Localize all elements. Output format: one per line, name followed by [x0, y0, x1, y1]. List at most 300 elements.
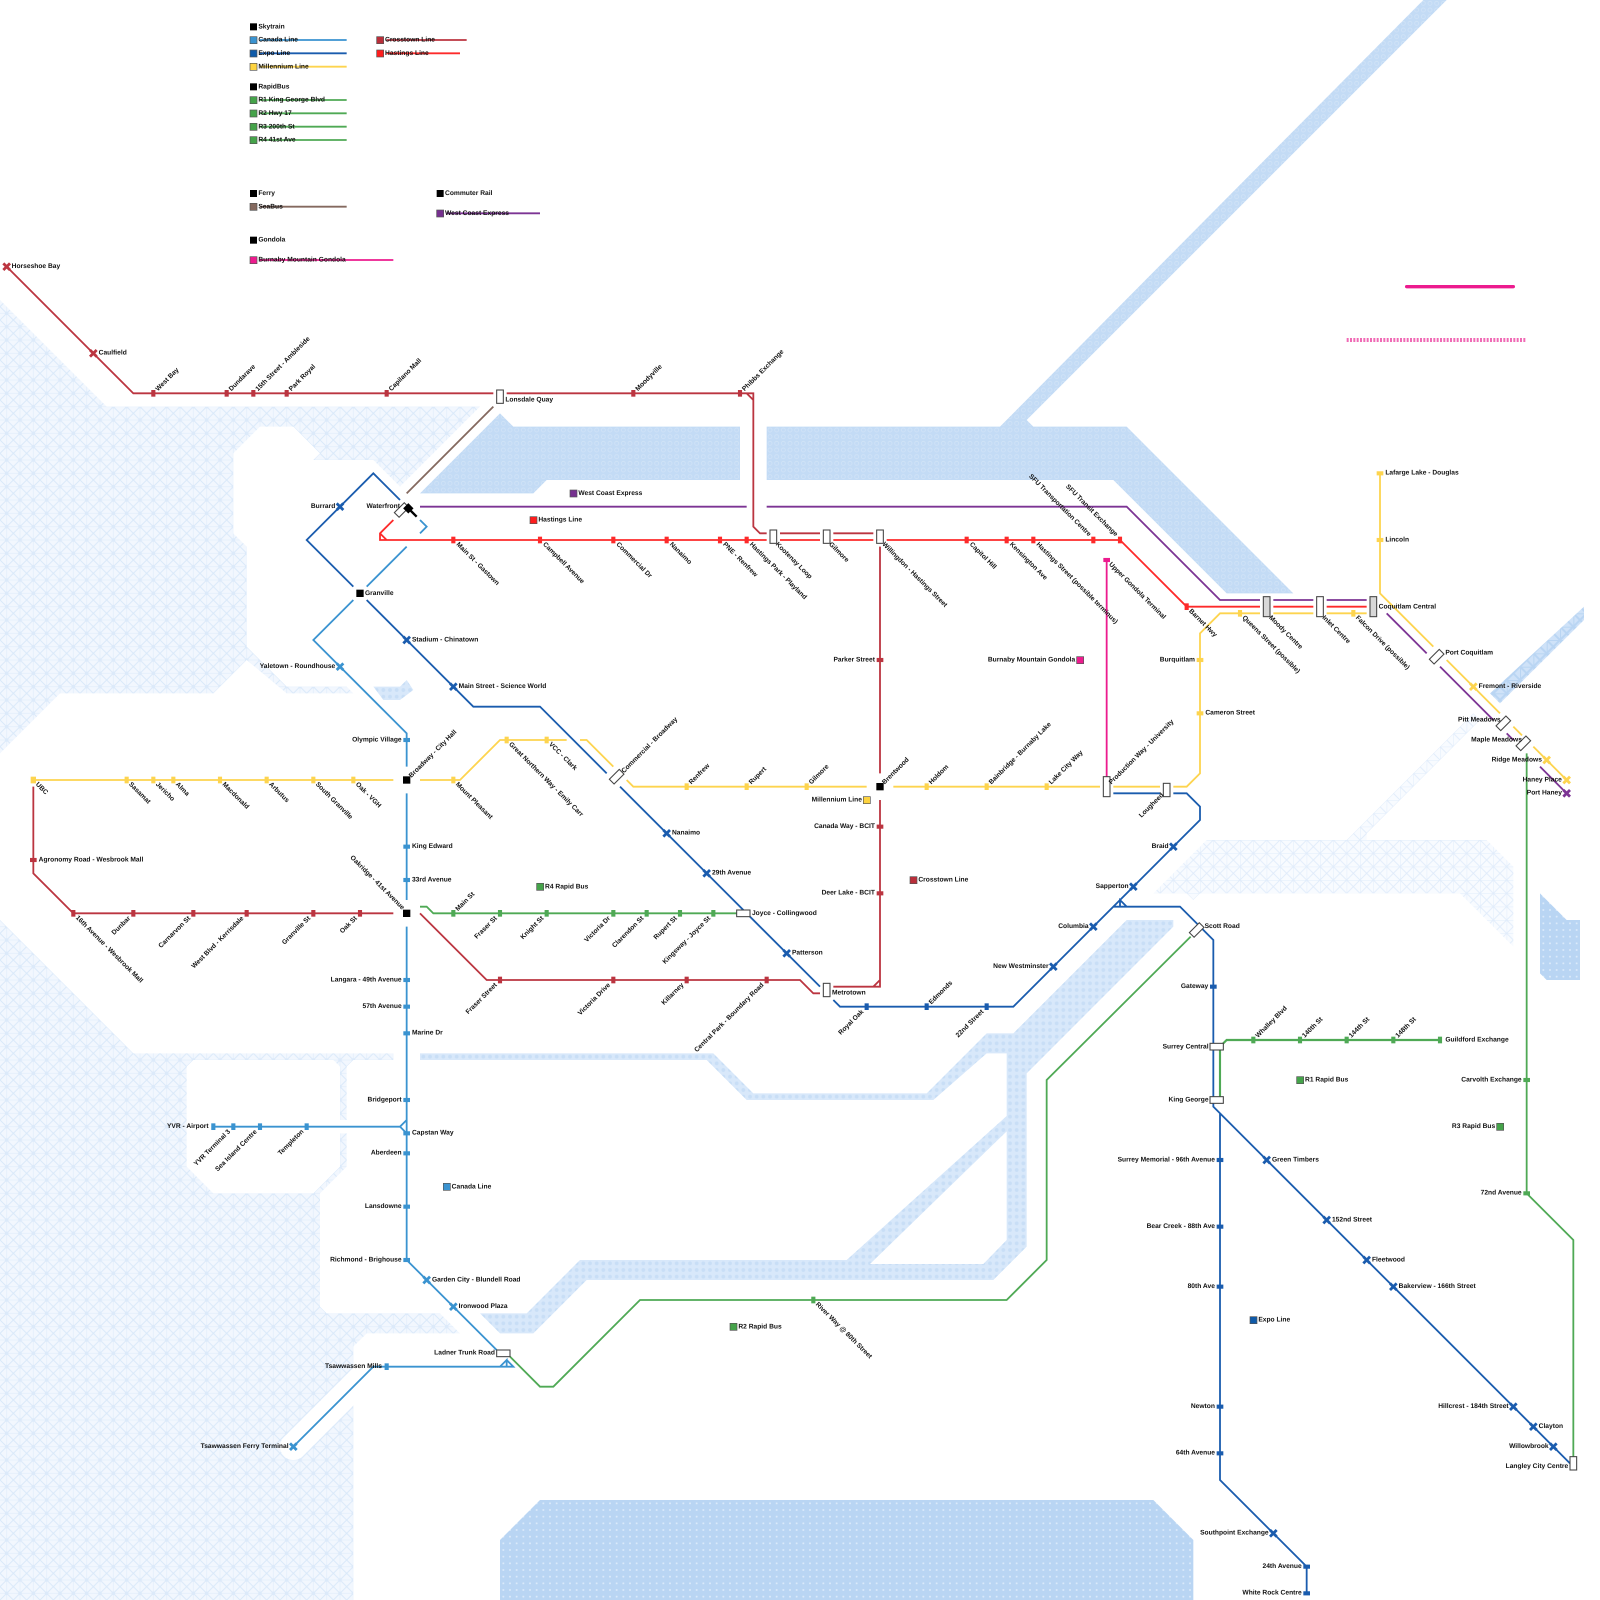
interchange: Commercial - Broadway: Commercial - Broadway — [619, 713, 685, 778]
station: 144th St — [1347, 1012, 1378, 1043]
line tag: Burnaby Mountain Gondola: Burnaby Mountain Gondola — [988, 655, 1078, 668]
station: Capstan Way: Capstan Way — [412, 1128, 457, 1141]
station: Oak St — [338, 910, 365, 938]
station: Braid — [1152, 841, 1177, 855]
legend: SeaBus — [250, 202, 347, 215]
line tag: Millennium Line — [812, 795, 870, 808]
station: Mount Pleasant: Mount Pleasant — [451, 780, 498, 827]
station: Green Timbers: Green Timbers — [1272, 1155, 1322, 1168]
water: upper strait — [0, 300, 480, 753]
station: Holdom — [927, 762, 954, 790]
station: Braid: Braid — [1152, 841, 1171, 855]
station: Edmonds: Edmonds — [927, 976, 960, 1009]
station: Bakerview - 166th Street — [1390, 1281, 1480, 1295]
interchange: Pitt Meadows — [1458, 715, 1511, 731]
water: pitt lake patch — [1540, 893, 1580, 980]
station: Burrard: Burrard — [311, 501, 338, 515]
station: Oak St: Oak St — [338, 911, 365, 938]
legend: Millennium Line: Millennium Line — [258, 62, 312, 75]
interchange: Scott Road — [1189, 921, 1242, 937]
legend: West Coast Express: West Coast Express — [445, 208, 512, 222]
station: Sasamat: Sasamat — [124, 780, 156, 812]
station: Clayton — [1530, 1421, 1566, 1435]
station: Renfrew — [687, 760, 716, 790]
station: Killarney — [659, 977, 691, 1010]
interchange: King George — [1169, 1095, 1223, 1108]
station: Sapperton: Sapperton — [1096, 881, 1131, 895]
station: Fremont - Riverside: Fremont - Riverside — [1479, 681, 1544, 695]
station: Granville St: Granville St — [280, 911, 319, 950]
water: fraser river — [420, 920, 1173, 1333]
station: Carvolth Exchange — [1461, 1075, 1530, 1088]
station: Hillcrest - 184th Street — [1438, 1401, 1517, 1415]
interchange: Willingdon: Willingdon - Hastings Street — [877, 540, 953, 615]
water: ferry causeway cut — [293, 1367, 373, 1447]
station: Agronomy Road — [30, 855, 148, 868]
station: 80th Ave — [1188, 1281, 1223, 1295]
station: Guildford Exchange: Guildford Exchange — [1445, 1035, 1512, 1048]
station: Whalley Blvd — [1253, 1002, 1294, 1043]
legend: Crosstown Line: Crosstown Line — [385, 35, 438, 48]
station: Burquitlam — [1160, 655, 1203, 668]
station: 57th Avenue — [362, 1001, 410, 1015]
station: Sasamat — [124, 777, 156, 812]
station: West Bay — [153, 363, 186, 397]
station: Haney Place — [1523, 775, 1570, 788]
station: Phibbs Exchange: Phibbs Exchange — [740, 345, 791, 396]
station: Falcon Drive: Falcon Drive (possible) — [1351, 613, 1415, 678]
station: Lansdowne: Lansdowne — [365, 1201, 405, 1215]
station: Hillcrest - 184th Street: Hillcrest - 184th Street — [1438, 1401, 1513, 1415]
station: Granville St — [280, 910, 319, 950]
station: Canada Way - BCIT — [814, 821, 883, 835]
legend: RapidBus: RapidBus — [258, 82, 292, 95]
station: Edmonds — [927, 976, 960, 1010]
station: Victoria Dr: Victoria Dr — [582, 911, 618, 947]
line: West Coast Express — [420, 507, 1567, 793]
station: Arbutus — [264, 777, 294, 810]
station: Nanaimo north: Nanaimo — [665, 540, 696, 571]
station: YVR Terminal 3: YVR Terminal 3 — [192, 1125, 237, 1171]
interchange: Langley City Centre — [1506, 1457, 1577, 1475]
station: 148th St: 148th St — [1393, 1012, 1424, 1043]
station: YVR - Airport: YVR - Airport — [167, 1121, 213, 1135]
station: Templeton — [276, 1123, 311, 1160]
station: Fraser St — [472, 910, 505, 944]
interchange: Ladner Trunk Road — [434, 1348, 510, 1361]
legend: Commuter Rail — [437, 188, 497, 202]
water: boundary bay — [500, 1500, 1193, 1600]
stations: RapidBus lines — [453, 560, 1530, 1367]
line tag: West Coast Express — [570, 488, 645, 502]
station: Sea Island Centre: Sea Island Centre — [213, 1125, 264, 1176]
station: Columbia: Columbia — [1058, 921, 1092, 935]
interchange: Lougheed — [1137, 783, 1171, 823]
legend: Millennium Line — [250, 62, 347, 75]
station: Port Haney — [1527, 788, 1570, 801]
interchange: Metrotown — [823, 983, 868, 1001]
station: Hastings Park - Playland: Hastings Park - Playland — [745, 540, 811, 606]
station: Capitol Hill — [965, 537, 1002, 577]
station: Ridge Meadows: Ridge Meadows — [1492, 755, 1545, 768]
line tag: R2 Rapid Bus: R2 Rapid Bus — [738, 1322, 785, 1335]
legend: Expo Line — [250, 48, 347, 62]
station: 152nd Street: 152nd Street — [1332, 1215, 1376, 1228]
interchange: Production Way: Production Way - University — [1107, 715, 1181, 789]
station: Burrard — [311, 501, 343, 515]
station: Southpoint Exchange — [1200, 1528, 1277, 1541]
stations: Hastings line — [451, 472, 1221, 644]
decorative pink solid line — [1407, 286, 1513, 288]
line: Hastings — [380, 520, 1367, 607]
station: Rupert St — [651, 910, 685, 945]
station: Main St - Gastown: Main St - Gastown — [451, 540, 503, 592]
station: Horseshoe Bay: Horseshoe Bay — [12, 261, 63, 275]
legend: R1: R1 King George Blvd — [258, 95, 328, 108]
station: Newton: Newton — [1191, 1401, 1218, 1415]
interchange: Granville: Granville — [365, 588, 396, 602]
station: Rupert St: Rupert St — [651, 911, 685, 945]
station: Barnet Hwy: Barnet Hwy — [1184, 607, 1221, 644]
station: Marine Dr: Marine Dr — [412, 1028, 447, 1041]
station: Macdonald: Macdonald — [217, 780, 253, 816]
station: Agronomy Road: Agronomy Road - Wesbrook Mall — [39, 855, 148, 868]
station: Main St: Main St — [453, 887, 483, 916]
line tag: Hastings Line: Hastings Line — [538, 515, 585, 528]
legend: R4: R4 41st Ave — [258, 135, 299, 148]
interchange: Inlet Centre: Inlet Centre — [1317, 613, 1355, 651]
station: Ridge Meadows — [1492, 755, 1550, 768]
line tag: Canada Line — [443, 1182, 494, 1195]
station: 140th St: 140th St — [1300, 1012, 1331, 1043]
station: Knight St: Knight St — [518, 911, 552, 944]
line: R3 200th St — [1527, 753, 1573, 1457]
interchange: Moody Centre — [1263, 597, 1307, 656]
station: Willowbrook: Willowbrook — [1509, 1441, 1552, 1455]
station: South Granville: South Granville — [311, 780, 357, 826]
station: 72nd Avenue: 72nd Avenue — [1481, 1188, 1525, 1201]
legend: Hastings Line — [377, 48, 460, 62]
station: Oak - VGH — [351, 777, 385, 814]
station: Capilano Mall — [387, 353, 430, 397]
interchange: Commercial - Broadway — [609, 713, 685, 784]
station: Parker Street — [833, 655, 883, 668]
line: R2 Hwy 17 — [510, 937, 1191, 1387]
legend: Crosstown Line — [377, 35, 467, 48]
station: Olympic Village — [352, 735, 410, 748]
line tag: Burnaby Mountain Gondola — [988, 655, 1084, 668]
legend: Gondola — [250, 235, 288, 248]
station: Queens Street: Queens Street (possible) — [1237, 613, 1305, 681]
station: Dundarave — [227, 360, 263, 397]
station: Fleetwood — [1363, 1255, 1408, 1268]
station: Ironwood Plaza — [450, 1301, 511, 1315]
station: Bear Creek - 88th Ave — [1147, 1221, 1223, 1235]
legend: Ferry — [250, 188, 278, 202]
station: Yaletown - Roundhouse: Yaletown - Roundhouse — [260, 661, 338, 675]
station: 80th Ave: 80th Ave — [1188, 1281, 1218, 1295]
station: Bakerview - 166th Street: Bakerview - 166th Street — [1399, 1281, 1480, 1295]
station: Nanaimo — [663, 828, 703, 841]
station: Kensington Ave — [1005, 537, 1052, 587]
station: Lafarge Lake - Douglas — [1377, 468, 1462, 481]
station: Carnarvon St: Carnarvon St — [156, 911, 199, 953]
station: Rupert — [747, 762, 774, 790]
legend: R3: R3 200th St — [258, 122, 299, 135]
station: Haney Place: Haney Place — [1523, 775, 1565, 788]
station: Cameron Street — [1197, 708, 1259, 721]
interchange: Maple Meadows: Maple Meadows — [1471, 735, 1525, 748]
station: Caulfield — [90, 348, 129, 361]
station: 22nd Street: 22nd Street — [954, 1004, 992, 1042]
station: Victoria Dr — [582, 910, 618, 947]
station: Lafarge Lake - Douglas: Lafarge Lake - Douglas — [1385, 468, 1462, 481]
station: Richmond - Brighouse — [330, 1255, 410, 1268]
stations: Expo line — [311, 501, 1566, 1600]
station: Marine Dr — [403, 1028, 447, 1041]
station: PNE - Renfrew — [718, 537, 761, 583]
interchange: Joyce - Collingwood — [737, 908, 819, 922]
station: Lincoln: Lincoln — [1385, 535, 1412, 548]
station: 140th St — [1300, 1012, 1331, 1043]
interchange: Pitt Meadows: Pitt Meadows — [1458, 715, 1504, 728]
station: Tsawwassen Mills — [325, 1361, 387, 1375]
legend: Burnaby Mountain Gondola: Burnaby Mountain Gondola — [258, 255, 349, 268]
legend: SeaBus: SeaBus — [258, 202, 286, 215]
interchange: Port Coquitlam: Port Coquitlam — [1445, 648, 1494, 661]
station: Victoria Drive: Victoria Drive — [576, 979, 617, 1020]
line: Burnaby Mountain Gondola — [1106, 560, 1108, 777]
station: Langara - 49th Avenue — [331, 975, 410, 988]
station: Victoria Drive — [576, 977, 617, 1020]
legend: Hastings Line: Hastings Line — [385, 48, 432, 62]
interchange: Langley City Centre: Langley City Centre — [1506, 1461, 1571, 1475]
station: Mount Pleasant — [451, 777, 498, 827]
station: 144th St: 144th St — [1347, 1012, 1378, 1043]
interchange: Broadway - City Hall — [403, 724, 465, 784]
water: light lattice east — [1153, 713, 1513, 947]
station: West Bay: West Bay — [153, 363, 186, 396]
legend: Skytrain — [250, 22, 287, 35]
station: Carvolth Exchange: Carvolth Exchange — [1461, 1075, 1525, 1088]
station: Gilmore — [807, 760, 836, 790]
water: burrard inlet east and indian arm — [767, 0, 1447, 593]
station: Nanaimo north — [665, 537, 696, 571]
line tag: Expo Line: Expo Line — [1258, 1315, 1293, 1328]
legend: Commuter Rail: Commuter Rail — [445, 188, 497, 202]
station: Lansdowne — [365, 1201, 410, 1215]
station: Stadium - Chinatown: Stadium - Chinatown — [412, 635, 481, 648]
station: SFU Transit Exchange: SFU Transit Exchange — [1061, 482, 1122, 543]
station: Alma: Alma — [171, 780, 194, 803]
station: 72nd Avenue — [1481, 1188, 1530, 1201]
interchange: Ladner Trunk Road: Ladner Trunk Road — [434, 1348, 498, 1361]
station: 22nd Street — [954, 1003, 992, 1042]
water: burrard inlet west — [420, 413, 740, 493]
station: 24th Avenue — [1262, 1561, 1310, 1575]
line tag: R1 Rapid Bus — [1297, 1075, 1351, 1088]
station: Patterson: Patterson — [792, 948, 825, 961]
interchange: Kootenay Loop: Kootenay Loop — [771, 540, 816, 586]
interchange: Scott Road: Scott Road — [1205, 921, 1242, 935]
interchange: Maple Meadows — [1471, 735, 1531, 751]
line tag: R1 Rapid Bus: R1 Rapid Bus — [1305, 1075, 1351, 1088]
station: Upper Gondola Terminal: Upper Gondola Terminal — [1104, 560, 1171, 627]
station: VCC - Clark — [544, 737, 581, 777]
interchange: Granville — [356, 588, 396, 602]
station: Guildford Exchange — [1440, 1035, 1512, 1048]
station: Gateway: Gateway — [1181, 981, 1211, 995]
line tag: West Coast Express: West Coast Express — [578, 488, 645, 502]
station: Langara - 49th Avenue: Langara - 49th Avenue — [331, 975, 405, 988]
station: Fraser Street: Fraser Street — [464, 977, 505, 1019]
line tag: Hastings Line — [530, 515, 585, 528]
line: Canada — [213, 520, 513, 1447]
line: R1 King George — [1220, 1040, 1440, 1097]
line: Crosstown — [7, 267, 880, 993]
water: lower strait — [0, 920, 460, 1600]
station: Capitol Hill: Capitol Hill — [965, 540, 1002, 577]
interchange: Surrey Central: Surrey Central — [1163, 1042, 1213, 1055]
interchange: Moody Centre: Moody Centre — [1264, 613, 1307, 656]
station: Central Park - Boundary Road: Central Park - Boundary Road — [692, 979, 771, 1057]
station: King Edward — [403, 841, 455, 855]
legend: Ferry: Ferry — [258, 188, 278, 202]
legend: Burnaby Mountain Gondola — [250, 255, 393, 268]
station: Dundarave: Dundarave — [227, 360, 263, 396]
station: Nanaimo: Nanaimo — [672, 828, 703, 841]
station: UBC: UBC — [31, 780, 52, 801]
station: Stadium - Chinatown — [403, 635, 481, 648]
station: Burquitlam: Burquitlam — [1160, 655, 1196, 668]
decorative pink dotted line — [1347, 339, 1527, 341]
station: Campbell Avenue: Campbell Avenue — [538, 540, 589, 591]
station: Moodyville — [633, 360, 669, 397]
station: Cameron Street: Cameron Street — [1205, 708, 1259, 721]
station: Main St — [453, 887, 483, 917]
station: Commercial Dr — [611, 537, 657, 586]
station: Renfrew: Renfrew — [687, 760, 716, 789]
station: Caulfield: Caulfield — [99, 348, 129, 361]
station: Patterson — [783, 948, 825, 961]
station: Carnarvon St — [156, 910, 199, 953]
station: 57th Avenue: 57th Avenue — [362, 1001, 405, 1015]
line tag: Crosstown Line: Crosstown Line — [918, 875, 971, 888]
station: UBC — [31, 777, 52, 801]
interchange: Lonsdale Quay: Lonsdale Quay — [505, 395, 556, 408]
station: 24th Avenue: 24th Avenue — [1262, 1561, 1305, 1575]
station: Newton — [1191, 1401, 1223, 1415]
station: SFU Transportation Centre: SFU Transportation Centre — [1024, 472, 1095, 543]
interchange: Port Coquitlam — [1429, 648, 1494, 664]
station: Dunbar: Dunbar — [109, 911, 138, 940]
legend: R3 — [250, 122, 347, 135]
station: Tsawwassen Mills: Tsawwassen Mills — [325, 1361, 385, 1375]
interchange: Oakridge - 41st Avenue: Oakridge - 41st Avenue — [345, 853, 409, 917]
line: Expo — [307, 473, 1570, 1593]
station: 64th Avenue: 64th Avenue — [1176, 1448, 1218, 1461]
station: Kensington Ave: Kensington Ave — [1005, 540, 1052, 587]
station: Southpoint Exchange: Southpoint Exchange — [1200, 1528, 1272, 1541]
station: Deer Lake - BCIT — [822, 888, 883, 901]
station: Whalley Blvd: Whalley Blvd — [1253, 1002, 1294, 1043]
station: Hastings Street: Hastings Street (possible terminus) — [1031, 540, 1123, 632]
station: Bear Creek - 88th Ave: Bear Creek - 88th Ave — [1147, 1221, 1218, 1235]
legend — [250, 22, 540, 268]
legend: West Coast Express — [437, 208, 540, 222]
station: Capilano Mall: Capilano Mall — [387, 353, 430, 396]
station: River Way @ 80th Street: River Way @ 80th Street — [811, 1300, 877, 1367]
interchange: Brentwood: Brentwood — [880, 754, 916, 789]
line tag: R3 Rapid Bus — [1452, 1121, 1504, 1135]
station: Clayton: Clayton — [1539, 1421, 1566, 1435]
station: Fraser St: Fraser St — [472, 911, 505, 944]
station: South Granville — [311, 777, 357, 826]
station: 64th Avenue — [1176, 1448, 1223, 1461]
station: Royal Oak: Royal Oak — [836, 1005, 871, 1040]
station: Main Street - Science World — [450, 681, 549, 695]
interchange: King George: King George — [1169, 1095, 1212, 1108]
interchange: Brentwood — [876, 754, 916, 790]
station: Lincoln — [1377, 535, 1412, 548]
interchange: Lougheed: Lougheed — [1137, 789, 1171, 823]
station: Jericho — [151, 777, 179, 808]
interchange: Kootenay Loop — [770, 530, 816, 586]
line: R4 41st Ave — [420, 907, 737, 913]
station: Knight St — [518, 910, 552, 944]
station: Fraser Street — [464, 977, 505, 1019]
station: New Westminster — [993, 961, 1057, 975]
line tag: Millennium Line: Millennium Line — [812, 795, 865, 808]
station: Port Haney: Port Haney — [1527, 788, 1565, 801]
interchange: Lonsdale Quay — [497, 390, 556, 408]
station: 33rd Avenue — [403, 875, 454, 888]
legend: R2 — [250, 108, 347, 122]
station: Park Royal: Park Royal — [287, 359, 324, 396]
station: West Blvd - Kerrisdale: West Blvd - Kerrisdale — [189, 912, 251, 973]
station: PNE - Renfrew: PNE - Renfrew — [718, 540, 761, 583]
station: 16th Avenue - Wesbrook Mall: 16th Avenue - Wesbrook Mall — [71, 913, 149, 991]
station: Ironwood Plaza: Ironwood Plaza — [459, 1301, 511, 1315]
station: Macdonald — [217, 777, 253, 816]
legend: Expo Line: Expo Line — [258, 48, 293, 62]
station: Sapperton — [1096, 881, 1137, 895]
station: Moodyville: Moodyville — [633, 360, 669, 396]
interchange: Gilmore north: Gilmore — [824, 540, 853, 569]
legend: RapidBus — [250, 82, 292, 95]
water: pitt river — [1490, 607, 1584, 703]
station: Oak - VGH: Oak - VGH — [351, 780, 385, 814]
station: Bridgeport — [368, 1095, 410, 1108]
station: 33rd Avenue: 33rd Avenue — [412, 875, 454, 888]
station: 15th Street - Ambleside: 15th Street - Ambleside — [253, 332, 317, 396]
station: 148th St — [1393, 1012, 1424, 1043]
interchange: Waterfront: Waterfront — [366, 501, 404, 515]
stations: Crosstown line — [3, 261, 883, 1057]
station: Templeton: Templeton — [276, 1125, 311, 1160]
station: 29th Avenue: 29th Avenue — [712, 868, 754, 881]
station: Kingsway - Joyce St: Kingsway - Joyce St — [660, 911, 719, 969]
station: VCC - Clark: VCC - Clark — [544, 740, 581, 777]
station: Garden City - Blundell Road — [423, 1275, 523, 1288]
interchange: Coquitlam Central — [1370, 597, 1441, 617]
station: YVR Terminal 3 — [192, 1123, 237, 1171]
interchange: Surrey Central — [1163, 1042, 1223, 1055]
line tag: Expo Line — [1250, 1315, 1293, 1328]
station: Richmond - Brighouse: Richmond - Brighouse — [330, 1255, 405, 1268]
interchange: Waterfront — [366, 501, 417, 517]
station: Clarendon St — [610, 910, 652, 953]
